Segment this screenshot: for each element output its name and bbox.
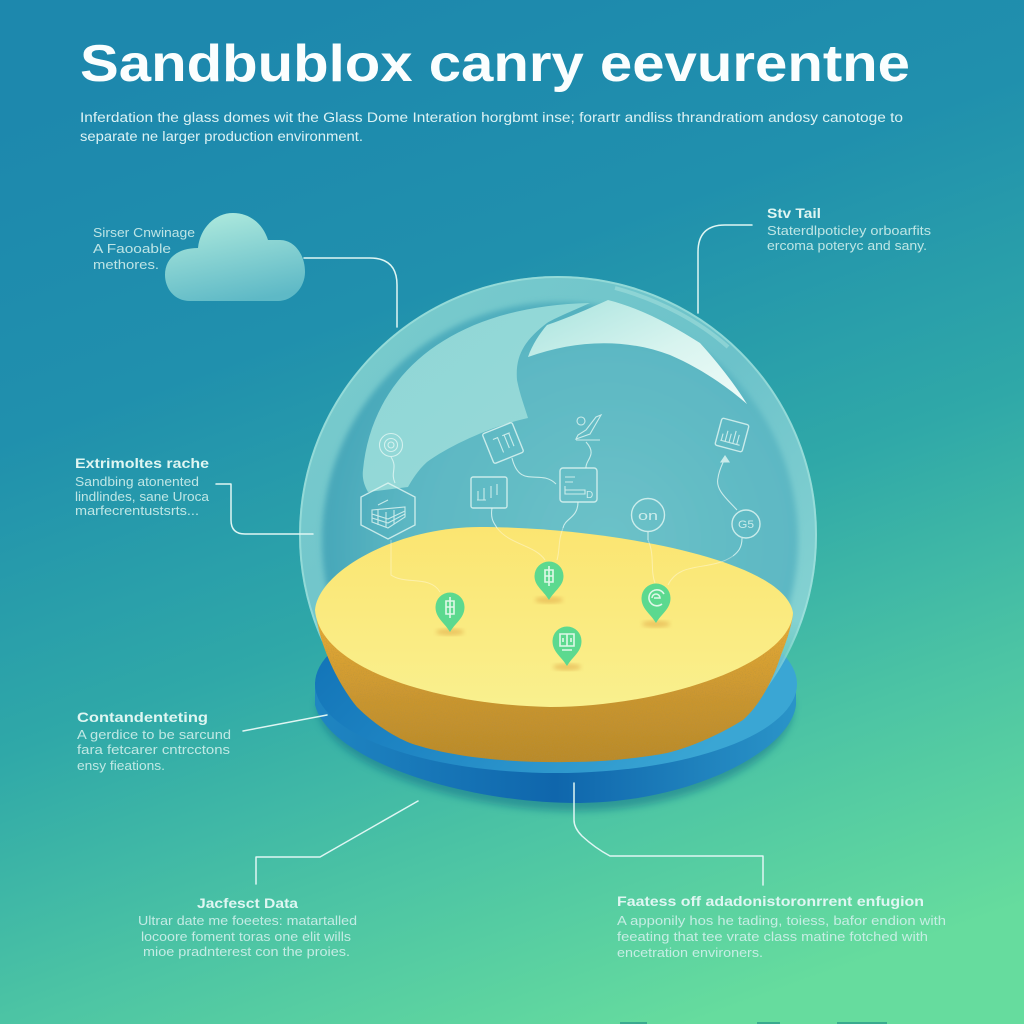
bottom edge marks	[620, 1022, 887, 1024]
map pins	[436, 562, 670, 670]
callout: lower left: Contandenteting	[77, 709, 208, 725]
icon: tilted card	[482, 422, 524, 464]
callout: left middle	[75, 455, 209, 518]
callout: top right	[767, 205, 931, 253]
icon: on circle: on	[638, 508, 658, 523]
callout: left middle: Sandbing atonented	[75, 475, 199, 489]
icon: tilted chart card	[715, 418, 749, 452]
callout: lower left: fara fetcarer cntrcctons	[77, 743, 230, 757]
network icons and wires	[361, 415, 760, 592]
intro paragraph	[80, 110, 903, 144]
icon: target	[380, 434, 402, 456]
callout: bottom right	[617, 893, 946, 960]
title: Sandbublox canry eevurentne	[80, 35, 910, 93]
connector: top right to dome	[698, 225, 752, 313]
callout: cloud text: methores.	[93, 258, 159, 272]
callout: lower left: A gerdice to be sarcund	[77, 728, 231, 742]
icon: cloud	[165, 213, 305, 301]
icon: plane	[576, 415, 601, 440]
callout: bottom right: A apponily hos he tading, toiess, bafor endion with	[617, 914, 946, 928]
callout: bottom right: feeating that tee vrate class matine fotched with	[617, 930, 928, 944]
glass dome	[299, 276, 817, 687]
intro paragraph: Inferdation the glass domes wit the Glass Dome Interation horgbmt inse; forartr andliss thrandratiom andosy canotoge to	[80, 110, 903, 125]
icon: hexagon server stack	[361, 483, 415, 539]
pin 2	[534, 562, 564, 604]
callout: bottom centre: mioe pradnterest con the proies.	[143, 945, 350, 959]
dome highlight: bright reflection	[528, 300, 747, 404]
callout: lower left: ensy fieations.	[77, 759, 165, 773]
callout: bottom right: Faatess off adadonistoronrrent enfugion	[617, 893, 924, 909]
connector: base to bottom right	[574, 783, 763, 885]
icon: on circle	[632, 498, 664, 532]
connector: left middle to dome	[216, 484, 313, 534]
icon: document	[560, 468, 597, 502]
pin 3	[642, 584, 670, 628]
connector: bottom data to base	[256, 801, 418, 884]
callout: bottom right: encetration environers.	[617, 946, 763, 960]
dome rim sheen	[615, 288, 728, 347]
connector: lower left to base	[243, 715, 327, 731]
callout: left middle: lindlindes, sane Uroca	[75, 490, 209, 504]
dome highlight: large reflection	[363, 303, 590, 492]
icon: document: D	[586, 490, 593, 501]
callout: bottom centre: Jacfesct Data	[197, 895, 298, 911]
connector: cloud to dome	[304, 258, 397, 327]
callout: bottom centre: Ultrar date me foeetes: matartalled	[138, 914, 357, 928]
yellow platform	[315, 527, 793, 762]
callout: top right: ercoma poteryc and sany.	[767, 239, 927, 253]
wires on platform	[391, 528, 733, 592]
callout: left middle: Extrimoltes rache	[75, 455, 209, 471]
intro paragraph: separate ne larger production environment.	[80, 129, 363, 144]
callout: bottom centre: locoore foment toras one elit wills	[141, 930, 351, 944]
callout: cloud text	[93, 226, 195, 272]
callout: top right: Stv Tail	[767, 205, 821, 221]
icon: bar chart card	[471, 477, 507, 508]
pin 4	[552, 626, 582, 670]
icon: 65 circle: G5	[738, 519, 754, 531]
callout: cloud text: Sirser Cnwinage	[93, 226, 195, 240]
wires between icons	[391, 442, 742, 556]
callout: top right: Staterdlpoticley orboarfits	[767, 224, 931, 238]
pin 1	[436, 593, 464, 636]
callout: lower left	[77, 709, 231, 773]
blue base plate	[315, 595, 797, 811]
icon: 65 circle	[732, 510, 760, 538]
callout: left middle: marfecrentustsrts...	[75, 504, 199, 518]
callout: cloud text: A Faooable	[93, 242, 171, 256]
callout: bottom centre	[138, 895, 357, 959]
